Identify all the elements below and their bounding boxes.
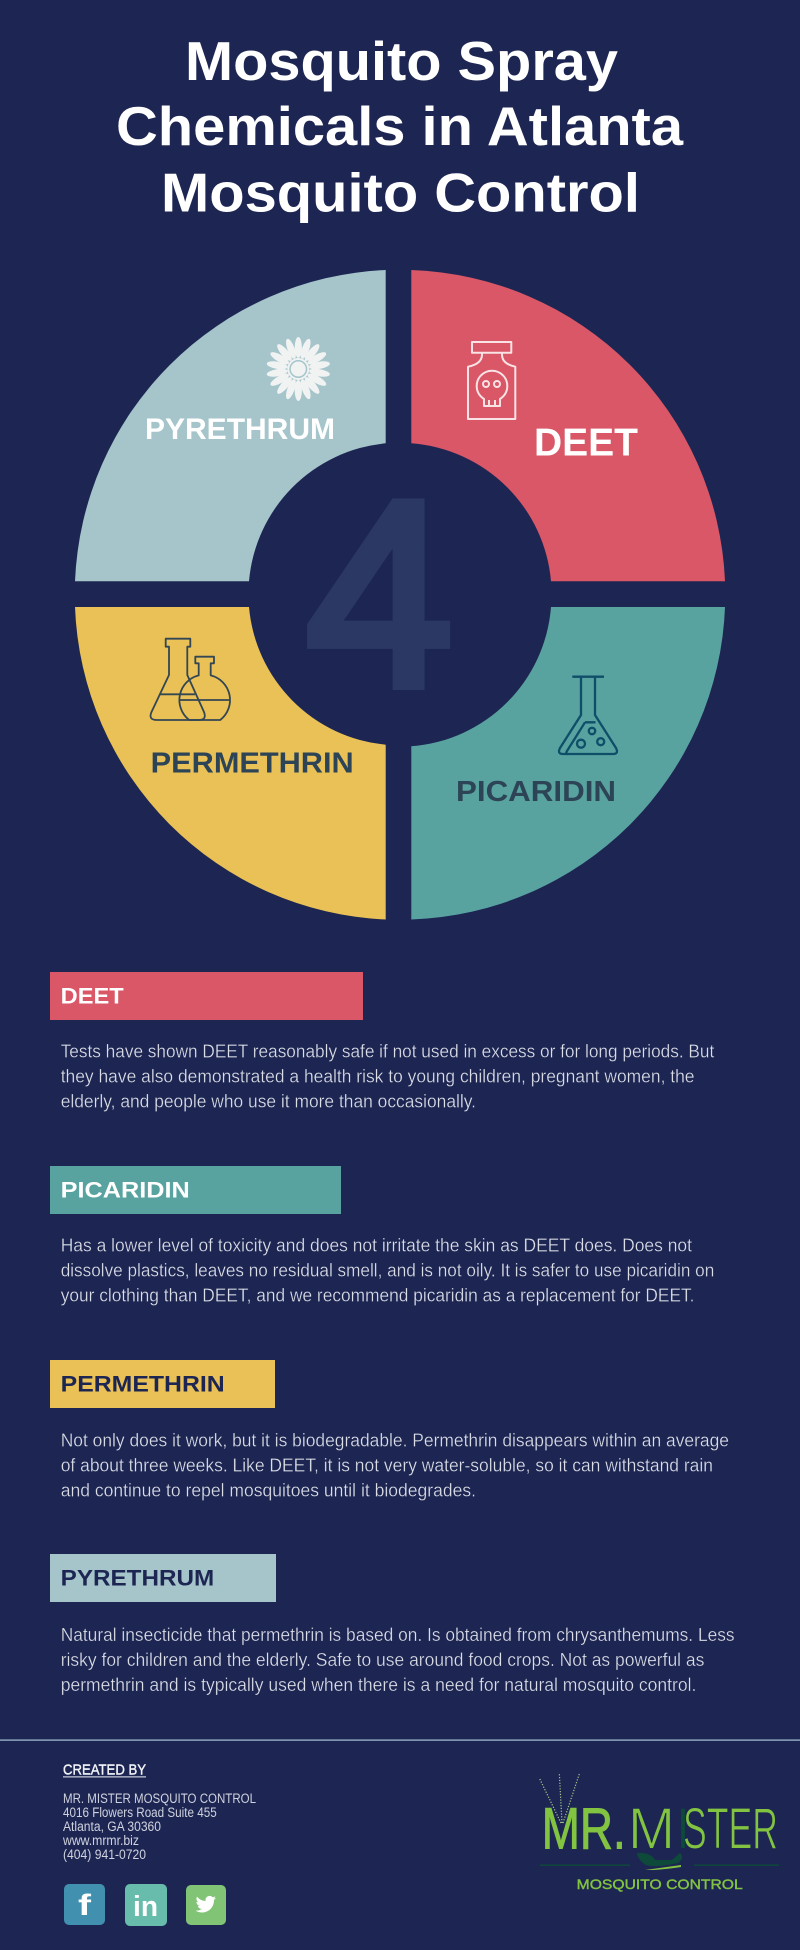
label: picaridin: PICARIDIN [456,776,616,808]
title: Mosquito Spray [185,30,618,92]
text block: address: 4016 Flowers Road Suite 455 [63,1805,217,1820]
text block: deet: Tests have shown DEET reasonably safe if not used in excess or for long periods. But [61,1041,714,1062]
icon: linkedin [125,1884,167,1926]
text block: deet [61,1041,714,1112]
icon: twitter [186,1885,226,1925]
text block: address: www.mrmr.biz [62,1833,139,1848]
text block: pyrethrum [61,1624,735,1695]
section: deet [50,972,714,1112]
heading bar: pyrethrum [50,1554,276,1602]
heading bar: deet: DEET [61,983,124,1008]
heading bar: pyrethrum: PYRETHRUM [61,1566,214,1591]
text block: address: (404) 941-0720 [63,1847,146,1862]
icon: two flasks [151,639,230,720]
heading bar: picaridin: PICARIDIN [61,1178,190,1203]
text block: permethrin: Not only does it work, but it is biodegradable. Permethrin disappears within an average [61,1430,729,1451]
section: pyrethrum [50,1554,735,1695]
icon: flower [266,337,330,401]
big number 4: 4 [306,446,453,741]
text block: picaridin: your clothing than DEET, and we recommend picaridin as a replacement for DEET. [61,1285,694,1306]
panel: permethrin sector [75,607,386,920]
icon: mosquito [540,1853,779,1870]
heading bar: permethrin [50,1360,275,1408]
section: picaridin [50,1166,714,1306]
text block: permethrin: of about three weeks. Like DEET, it is not very water-soluble, so it can withstand rain [61,1455,713,1476]
wordmark: M [628,1797,675,1862]
heading bar: picaridin [50,1166,341,1214]
wordmark: MR. [542,1797,626,1862]
section: permethrin [50,1360,729,1501]
panel: picaridin sector [411,607,725,920]
label: deet: DEET [534,422,638,465]
title: Mosquito Control [161,162,640,224]
text block: pyrethrum: risky for children and the elderly. Safe to use around food crops. Not as powerful as [61,1649,704,1670]
wordmark: I [676,1797,690,1862]
heading bar: permethrin: PERMETHRIN [61,1372,225,1397]
icon: poison bottle with skull [468,342,515,419]
footer: created by [62,1763,256,1862]
text block: picaridin [61,1235,714,1306]
title [116,30,683,224]
donut chart: four chemicals [75,270,725,920]
tagline: MOSQUITO CONTROL [577,1876,743,1892]
text block: pyrethrum: Natural insecticide that permethrin is based on. Is obtained from chrysanthemums. Less [61,1624,735,1645]
logo: Mr. Mister Mosquito Control [539,1773,779,1892]
text block: picaridin: Has a lower level of toxicity and does not irritate the skin as DEET does. Does not [61,1235,692,1256]
icon: spray dots [539,1773,579,1823]
icon: flask with bubbles [559,677,617,754]
heading bar: deet [50,972,363,1020]
icon: linkedin: in [133,1891,158,1923]
title: Chemicals in Atlanta [116,95,683,157]
text block: address [62,1791,256,1862]
panel: pyrethrum sector [75,270,386,581]
text block: permethrin [61,1430,729,1501]
heading: created by: CREATED BY [63,1763,146,1779]
text block: pyrethrum: permethrin and is typically used when there is a need for natural mosquito control. [61,1674,696,1695]
text block: deet: elderly, and people who use it more than occasionally. [61,1091,476,1112]
text block: deet: they have also demonstrated a health risk to young children, pregnant women, the [61,1066,694,1087]
text block: address: MR. MISTER MOSQUITO CONTROL [63,1791,256,1806]
text block: picaridin: dissolve plastics, leaves no residual smell, and is not oily. It is safer to use picaridin on [61,1260,714,1281]
label: permethrin: PERMETHRIN [151,748,354,780]
icon: facebook [64,1884,105,1925]
text block: address: Atlanta, GA 30360 [63,1819,161,1834]
label: pyrethrum: PYRETHRUM [145,413,335,446]
icon: facebook: f [78,1889,92,1922]
panel: deet sector [411,270,725,581]
wordmark [542,1797,778,1862]
text block: permethrin: and continue to repel mosquitoes until it biodegrades. [61,1480,476,1501]
